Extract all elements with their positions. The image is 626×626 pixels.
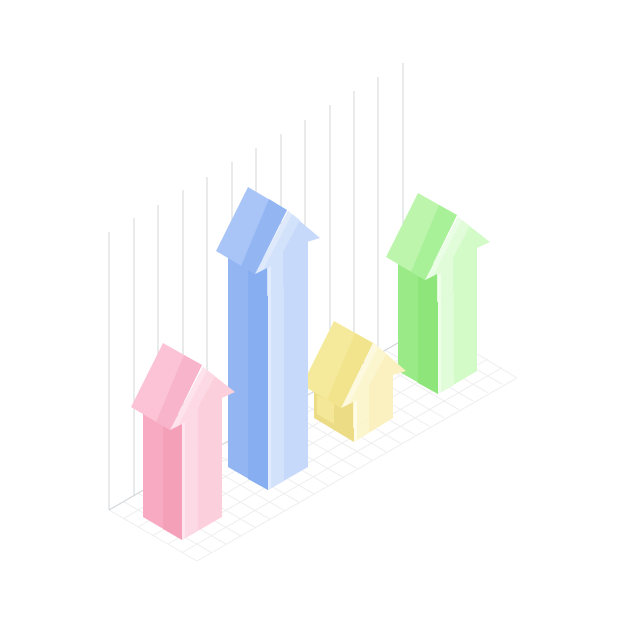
blue edge highlight xyxy=(268,266,271,490)
green right face xyxy=(438,245,477,394)
pink arrow head xyxy=(131,343,235,452)
floor grid xyxy=(109,325,517,561)
blue right face xyxy=(268,240,308,490)
yellow edge highlight xyxy=(354,400,357,442)
yellow arrow head xyxy=(302,321,406,428)
yellow right face xyxy=(354,370,393,442)
pink left face xyxy=(143,405,182,540)
green left face xyxy=(398,255,438,394)
yellow left face xyxy=(314,385,354,442)
green arrow head xyxy=(386,193,490,302)
back wall lines xyxy=(109,63,403,510)
yellow arrow xyxy=(302,321,406,442)
blue arrow xyxy=(216,187,320,490)
pink right face xyxy=(182,398,222,540)
green edge highlight xyxy=(438,273,441,394)
blue arrow head xyxy=(216,187,320,296)
green arrow xyxy=(386,193,490,394)
pink edge highlight xyxy=(182,422,185,540)
pink arrow xyxy=(131,343,235,540)
blue left face xyxy=(228,250,268,490)
